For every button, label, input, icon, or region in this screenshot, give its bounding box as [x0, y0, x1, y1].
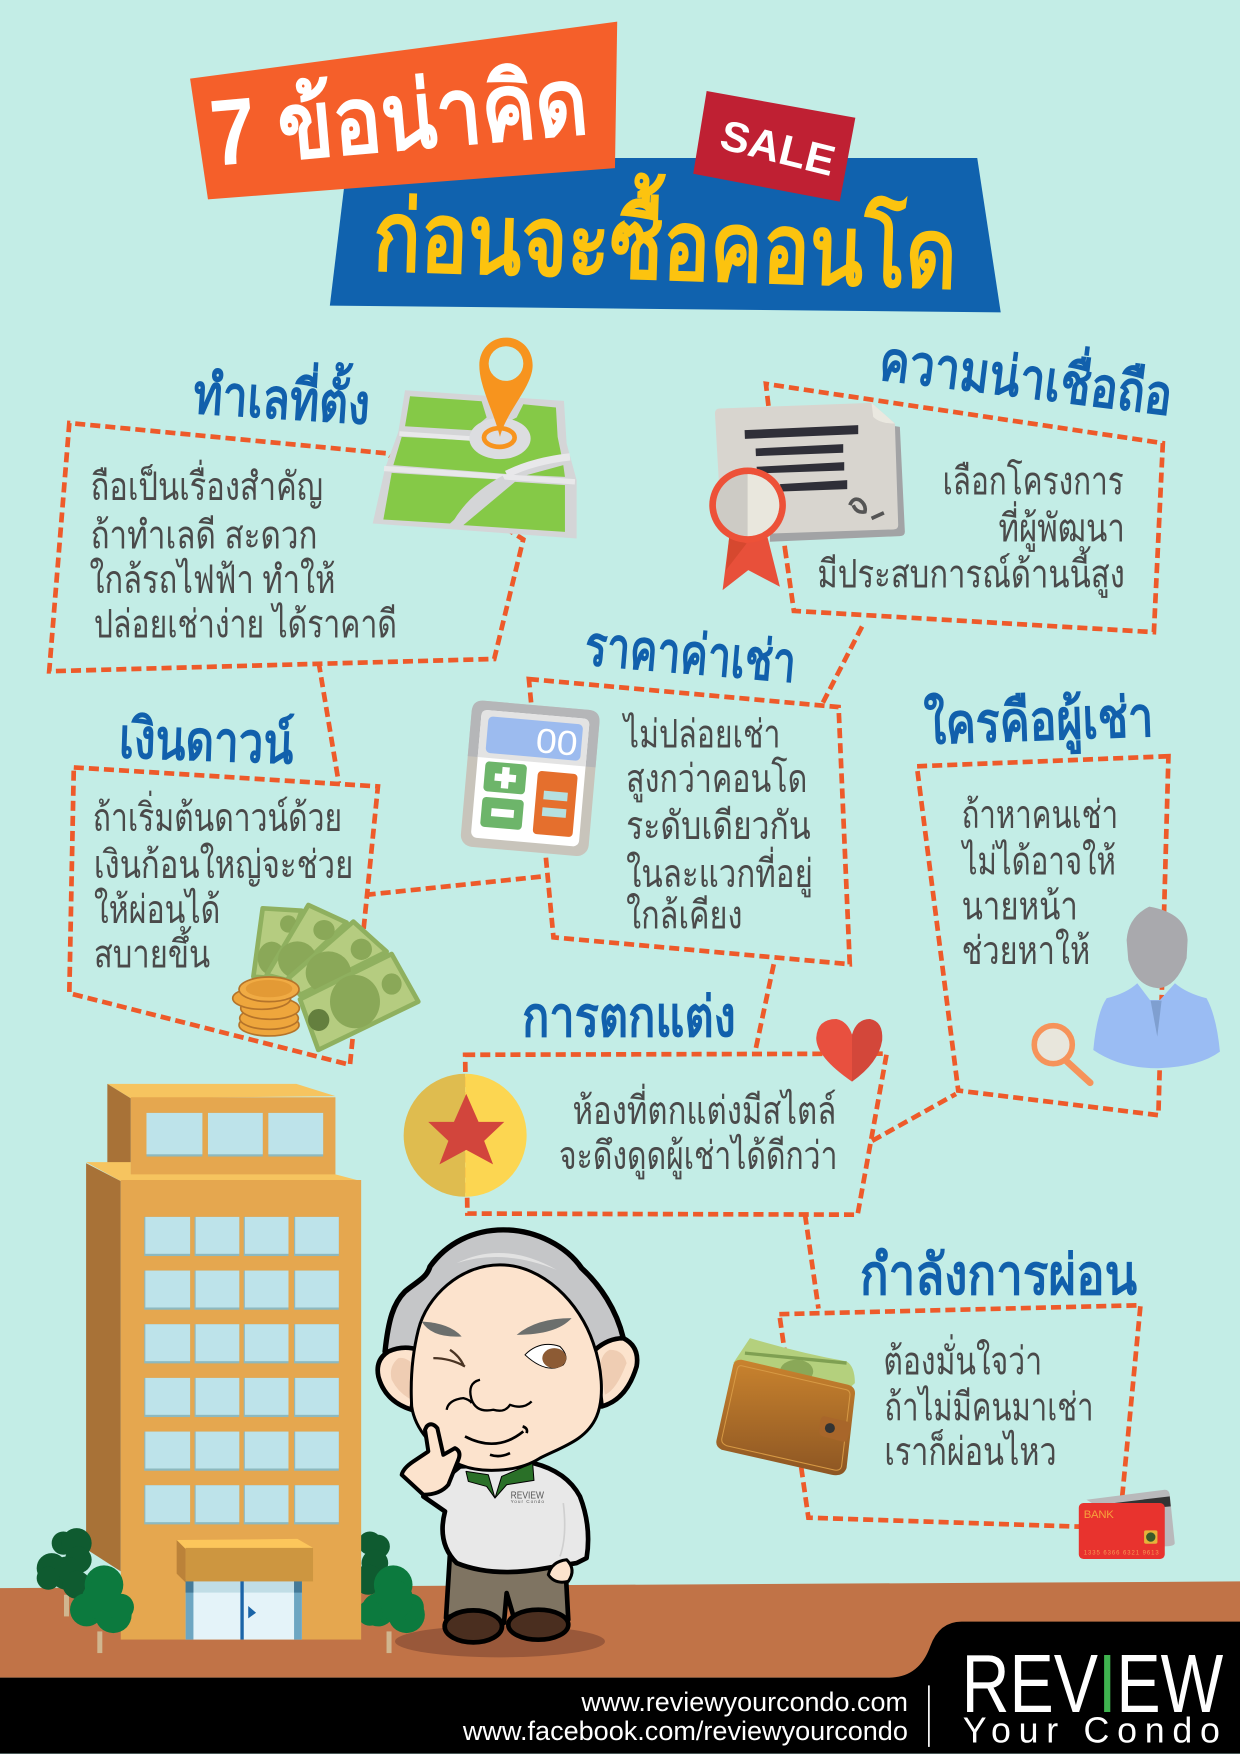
icon: banknotes and coins: [233, 905, 418, 1050]
icon: wallet: [716, 1338, 855, 1475]
title banner: [190, 22, 1001, 312]
text: down payment: สบายขึ้น: [94, 926, 210, 977]
website links: [462, 1687, 908, 1746]
shadow: [395, 1625, 605, 1657]
heading: tenants: ใครคือผู้เช่า: [923, 684, 1154, 760]
orange title ribbon: [190, 22, 617, 199]
text: rental price: ระดับเดียวกัน: [626, 805, 811, 848]
trousers: [446, 1553, 568, 1623]
text: location: ถือเป็นเรื่องสำคัญ: [91, 459, 323, 509]
hand on hip: [548, 1560, 572, 1582]
shirt logo: Your Condo: [511, 1499, 544, 1504]
heading: down payment: เงินดาวน์: [118, 706, 295, 775]
heading: decoration: การตกแต่ง: [522, 985, 736, 1048]
text: tenants: [960, 794, 1118, 973]
building: [86, 1084, 361, 1640]
text: tenants: ถ้าหาคนเช่า: [962, 794, 1118, 837]
website links: www.facebook.com/reviewyourcondo: [462, 1716, 908, 1746]
trees left: [37, 1528, 134, 1653]
text: tenants: ช่วยหาให้: [962, 929, 1090, 973]
text: instalments: [883, 1334, 1094, 1474]
text: credibility: ที่ผู้พัฒนา: [998, 501, 1125, 552]
shirt: [423, 1463, 588, 1572]
text: down payment: ให้ผ่อนได้: [94, 888, 220, 932]
tower upper block: [107, 1084, 335, 1176]
text: rental price: ใกล้เคียง: [626, 893, 742, 937]
text: instalments: ถ้าไม่มีคนมาเช่า: [884, 1385, 1094, 1429]
text: location: ปล่อยเช่าง่าย ได้ราคาดี: [94, 603, 397, 647]
black footer band: [0, 1622, 1240, 1754]
icon: calculator: [460, 700, 600, 857]
hair highlight: [457, 1253, 557, 1270]
hair: [385, 1230, 623, 1383]
icon: star coin: [404, 1074, 527, 1197]
text: location: ใกล้รถไฟฟ้า ทำให้: [89, 558, 335, 602]
eyebrows: [422, 1318, 572, 1337]
sale tag: SALE: [715, 112, 840, 186]
nose: [447, 1380, 532, 1411]
face: [411, 1265, 601, 1470]
tower main block: [86, 1162, 361, 1640]
icon: person: [1093, 907, 1220, 1068]
ground: [0, 1581, 1240, 1678]
trees right: [353, 1531, 425, 1653]
entrance: [177, 1539, 313, 1640]
shirt logo: REVIEW: [511, 1490, 544, 1501]
character: old man mascot: [378, 1230, 637, 1657]
pointing hand: [402, 1424, 459, 1495]
text: tenants: นายหน้า: [962, 885, 1078, 928]
open eye: [525, 1344, 566, 1368]
text: credibility: เลือกโครงการ: [943, 459, 1124, 504]
wink eye: [433, 1350, 465, 1366]
sale tag: [693, 91, 855, 202]
text: down payment: [93, 790, 353, 977]
icon: magnifier: [1034, 1026, 1090, 1083]
icon: calculator: 00: [534, 722, 579, 764]
title line 1: 7 ข้อน่าคิด: [206, 48, 592, 186]
icon: certificate: [709, 403, 905, 590]
dashed connector network: [49, 384, 1168, 1527]
mouth: [465, 1426, 527, 1456]
icon: bank cards: BANK: [1084, 1509, 1114, 1521]
text: tenants: ไม่ได้อาจให้: [960, 840, 1116, 884]
text: rental price: ไม่ปล่อยเช่า: [622, 712, 780, 756]
title line 2: ก่อนจะซื้อคอนโด: [372, 164, 959, 309]
brand logo: Your Condo: [963, 1710, 1220, 1750]
text: instalments: ต้องมั่นใจว่า: [883, 1334, 1042, 1384]
heading: instalments: กำลังการผ่อน: [860, 1243, 1137, 1306]
text: credibility: มีประสบการณ์ด้านนี้สูง: [817, 545, 1125, 597]
heading: rental price: ราคาค่าเช่า: [583, 614, 799, 694]
shoes: [445, 1610, 568, 1642]
text: location: [89, 459, 397, 647]
text: decoration: ห้องที่ตกแต่งมีสไตล์: [572, 1083, 836, 1133]
ears: [378, 1338, 637, 1410]
text: rental price: [622, 712, 813, 937]
icon: bank cards: 1335 6366 6321 9613: [1084, 1550, 1159, 1556]
collar: [466, 1463, 534, 1498]
shirt crease: [560, 1503, 565, 1556]
icon: map with pin: [373, 338, 577, 538]
footer: [0, 1622, 1240, 1754]
text: down payment: เงินก้อนใหญ่จะช่วย: [94, 843, 353, 887]
website links: www.reviewyourcondo.com: [580, 1687, 908, 1717]
text: down payment: ถ้าเริ่มต้นดาวน์ด้วย: [93, 790, 342, 840]
icon: heart: [816, 1019, 882, 1082]
icon: bank cards: [1079, 1490, 1175, 1559]
text: rental price: ในละแวกที่อยู่: [626, 846, 813, 897]
text: decoration: จะดึงดูดผู้เช่าได้ดีกว่า: [559, 1134, 837, 1179]
text: location: ถ้าทำเลดี สะดวก: [91, 514, 318, 557]
text: credibility: [817, 459, 1125, 597]
heading: location: ทำเลที่ตั้ง: [192, 353, 372, 436]
text: instalments: เราก็ผ่อนไหว: [884, 1428, 1057, 1474]
text: rental price: สูงกว่าคอนโด: [626, 756, 807, 802]
text: decoration: [559, 1083, 837, 1179]
heading: credibility: ความน่าเชื่อถือ: [876, 321, 1177, 427]
blue title ribbon: [330, 158, 1001, 312]
